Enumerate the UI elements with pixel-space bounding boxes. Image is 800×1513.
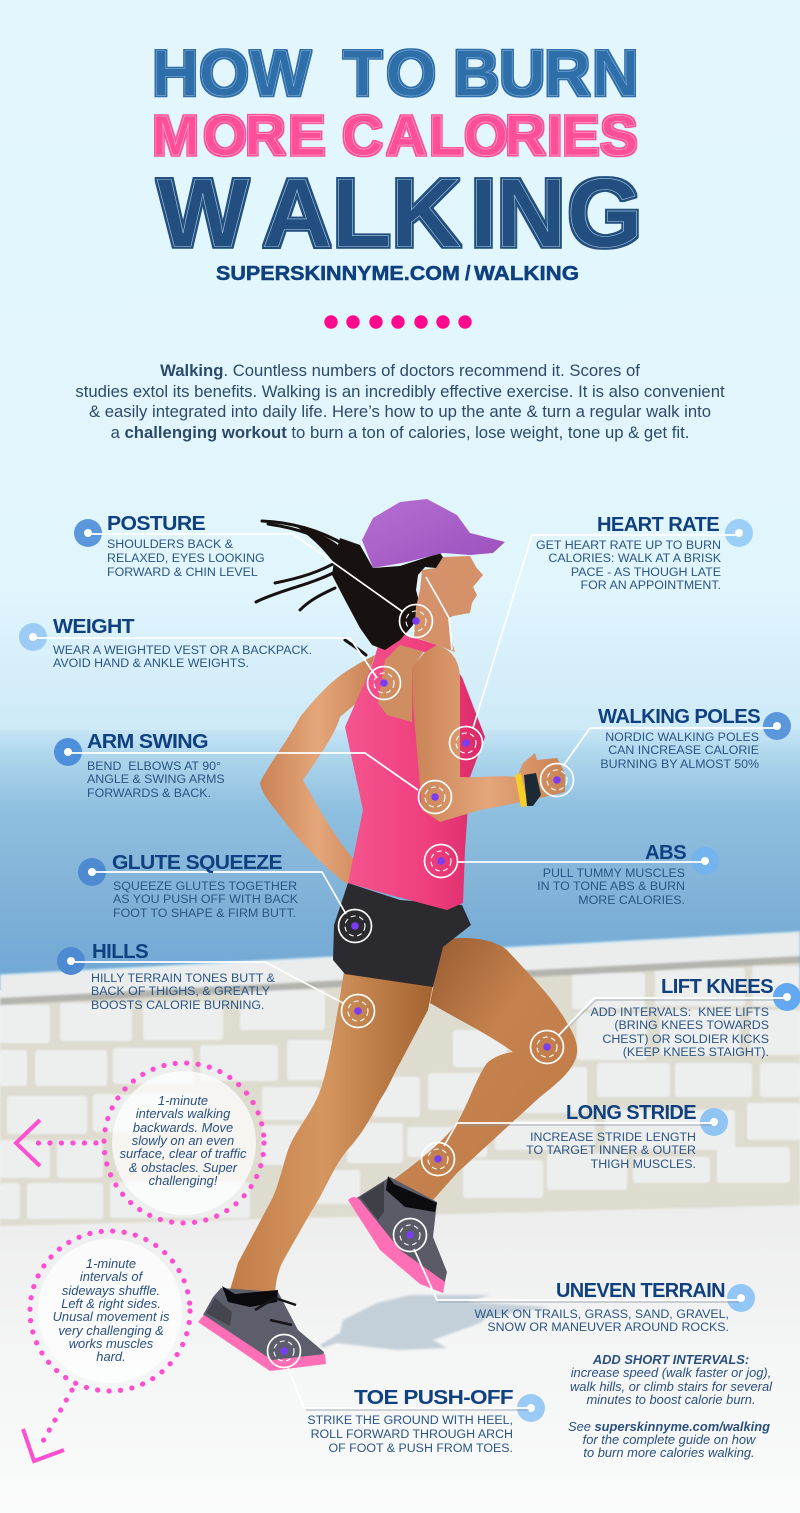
callout: posture xyxy=(74,513,403,612)
icon: long stride dot xyxy=(700,1108,728,1136)
url subtitle xyxy=(216,263,579,285)
icon: weight dot xyxy=(19,623,47,651)
heading: glute squeeze: GLUTE SQUEEZE xyxy=(112,852,282,874)
text: heart rate xyxy=(536,538,722,592)
text block: add short intervals: ADD SHORT INTERVALS: xyxy=(592,1352,749,1367)
text: heart rate: CALORIES: WALK AT A BRISK xyxy=(548,551,722,565)
near arm xyxy=(412,645,565,822)
icon: glute dot xyxy=(78,858,106,886)
shadow under uneven terrain line xyxy=(438,1301,739,1303)
title line: how to burn: HOW TO BURN xyxy=(152,38,639,110)
text: arm swing: ANGLE & SWING ARMS xyxy=(87,772,225,786)
text: lift knees: (KEEP KNEES STAIGHT). xyxy=(623,1045,769,1059)
url subtitle: WALKING xyxy=(474,263,579,285)
text: abs: IN TO TONE ABS & BURN xyxy=(537,879,685,893)
leader line: lift knees xyxy=(559,998,787,1035)
text: uneven terrain: SNOW OR MANEUVER AROUND ROCKS. xyxy=(487,1320,729,1334)
text: toe push-off: ROLL FORWARD THROUGH ARCH xyxy=(311,1427,513,1441)
row of pink dots xyxy=(324,315,472,329)
text: weight xyxy=(53,643,312,670)
leader line: toe push-off xyxy=(288,1368,531,1408)
callout text: intervals walking xyxy=(136,1106,231,1121)
arrow: down-left xyxy=(23,1390,72,1461)
callout text: sideways shuffle. xyxy=(62,1283,160,1298)
marker: long stride xyxy=(422,1142,454,1176)
callout text: 1-minute xyxy=(86,1256,136,1271)
wristband and watch xyxy=(515,773,541,807)
text: long stride xyxy=(526,1130,696,1171)
heading: weight: WEIGHT xyxy=(53,616,134,638)
marker: toe push-off xyxy=(268,1334,300,1368)
callout text: 1-minute xyxy=(158,1093,208,1108)
leader line: heart rate xyxy=(473,535,739,728)
heading: heart rate: HEART RATE xyxy=(597,514,719,536)
earphone and cable xyxy=(426,577,452,650)
text: glute squeeze xyxy=(113,879,299,920)
marker: abs xyxy=(424,844,458,878)
text: abs xyxy=(537,866,685,907)
icon: uneven terrain dot xyxy=(727,1284,755,1312)
text: toe push-off: STRIKE THE GROUND WITH HEEL, xyxy=(307,1413,513,1427)
text block: add short intervals xyxy=(568,1352,773,1460)
text: hills: HILLY TERRAIN TONES BUTT & xyxy=(91,971,276,985)
text: glute squeeze: SQUEEZE GLUTES TOGETHER xyxy=(113,879,297,893)
text: walking poles: NORDIC WALKING POLES xyxy=(605,730,759,744)
icon: lift knees dot xyxy=(773,983,800,1011)
callout: uneven terrain xyxy=(414,1249,755,1334)
text block: add short intervals: minutes to boost calorie burn. xyxy=(586,1392,756,1407)
icon: toe push-off dot xyxy=(517,1394,545,1422)
title line: more calories: MORE CALORIES xyxy=(152,104,638,167)
text block: add short intervals: walk hills, or climb stairs for several xyxy=(570,1379,773,1394)
text: long stride: INCREASE STRIDE LENGTH xyxy=(530,1130,696,1144)
text block: add short intervals: See superskinnyme.com/walking xyxy=(568,1419,770,1434)
heading: abs: ABS xyxy=(645,842,686,864)
text: uneven terrain xyxy=(474,1307,729,1334)
leader line: long stride xyxy=(444,1123,714,1146)
tank top xyxy=(345,633,485,910)
marker: arm swing xyxy=(418,780,452,814)
text: weight: AVOID HAND & ANKLE WEIGHTS. xyxy=(53,656,249,670)
callout: glute squeeze xyxy=(78,852,346,920)
text: toe push-off: OF FOOT & PUSH FROM TOES. xyxy=(328,1441,513,1455)
callout text: Unusal movement is xyxy=(53,1309,170,1324)
front shoe xyxy=(198,1286,326,1371)
callout: arm swing xyxy=(54,731,418,800)
text: posture: FORWARD & CHIN LEVEL xyxy=(107,565,258,579)
callout text xyxy=(53,1256,170,1364)
background: stone wall xyxy=(0,932,800,1226)
callout text xyxy=(120,1093,247,1188)
text: walking poles: CAN INCREASE CALORIE xyxy=(608,743,759,757)
text: lift knees xyxy=(590,1005,769,1059)
text block: add short intervals: to burn more calories walking. xyxy=(583,1445,755,1460)
heading: toe push-off: TOE PUSH-OFF xyxy=(354,1387,513,1409)
text: abs: MORE CALORIES. xyxy=(578,893,685,907)
target markers xyxy=(268,604,574,1368)
face and neck xyxy=(414,556,483,652)
leader line: weight xyxy=(33,638,377,678)
callout: walking poles xyxy=(563,706,791,771)
arrow: left xyxy=(16,1120,96,1166)
intro paragraph: studies extol its benefits. Walking is an incredibly effective exercise. It is also convenient xyxy=(75,382,725,401)
callout: abs xyxy=(458,842,719,907)
marker: weight xyxy=(368,666,400,700)
leader line: glute xyxy=(92,872,346,914)
text: heart rate: PACE - AS THOUGH LATE xyxy=(571,565,721,579)
leader line: posture xyxy=(88,534,403,612)
text: lift knees: ADD INTERVALS: KNEE LIFTS xyxy=(590,1005,769,1019)
text: posture xyxy=(107,537,265,579)
callout: lift knees xyxy=(559,976,800,1059)
background: ground xyxy=(0,1190,800,1513)
text: posture: RELAXED, EYES LOOKING xyxy=(107,551,265,565)
runner illustration xyxy=(198,499,577,1371)
leader line: abs xyxy=(458,861,705,863)
callout text: hard. xyxy=(96,1349,126,1364)
icon: heart rate dot xyxy=(725,519,753,547)
back skin between straps xyxy=(372,637,425,728)
leader line: arm swing xyxy=(68,753,418,790)
text: walking poles: BURNING BY ALMOST 50% xyxy=(600,757,759,771)
circle callout: walking backwards xyxy=(16,1063,264,1223)
intro paragraph: Walking. Countless numbers of doctors recommend it. Scores of xyxy=(160,361,640,380)
callout text: intervals of xyxy=(80,1269,144,1284)
text: heart rate: FOR AN APPOINTMENT. xyxy=(581,578,721,592)
heading: hills: HILLS xyxy=(92,941,148,963)
title line: walking: WALKING xyxy=(157,158,642,268)
text: hills xyxy=(91,971,276,1012)
marker: hills xyxy=(342,994,374,1028)
text: lift knees: (BRING KNEES TOWARDS xyxy=(614,1018,769,1032)
callout text: backwards. Move xyxy=(133,1120,233,1135)
callout text: challenging! xyxy=(149,1173,218,1188)
text: hills: BACK OF THIGHS, & GREATLY xyxy=(91,984,270,998)
front leg xyxy=(230,960,435,1294)
intro paragraph xyxy=(75,361,725,442)
leader line: uneven terrain xyxy=(414,1249,741,1300)
text: heart rate: GET HEART RATE UP TO BURN xyxy=(536,538,721,552)
ponytail and hair xyxy=(256,521,445,655)
icon: posture dot xyxy=(74,519,102,547)
text block: add short intervals: for the complete guide on how xyxy=(583,1432,756,1447)
text: arm swing xyxy=(87,759,225,800)
callout text: works muscles xyxy=(69,1336,154,1351)
rear shoe xyxy=(348,1176,447,1293)
leader line: hills xyxy=(71,962,343,1003)
far arm xyxy=(260,655,375,884)
circle callout: sideways shuffle xyxy=(23,1231,190,1461)
text: glute squeeze: FOOT TO SHAPE & FIRM BUTT. xyxy=(113,906,296,920)
heading: arm swing: ARM SWING xyxy=(87,731,208,753)
text: arm swing: BEND ELBOWS AT 90° xyxy=(87,759,221,773)
callout text: & obstacles. Super xyxy=(129,1160,238,1175)
ground shadow of the runner xyxy=(320,1295,550,1350)
background: sea xyxy=(0,730,800,990)
text: toe push-off xyxy=(307,1413,513,1455)
text: walking poles xyxy=(600,730,759,771)
callout: long stride xyxy=(444,1102,728,1171)
cap xyxy=(362,499,505,568)
heading: long stride: LONG STRIDE xyxy=(566,1102,696,1124)
intro paragraph: & easily integrated into daily life. Here’s how to up the ante & turn a regular walk into xyxy=(89,402,711,421)
heading: uneven terrain: UNEVEN TERRAIN xyxy=(556,1280,725,1302)
text: uneven terrain: WALK ON TRAILS, GRASS, SAND, GRAVEL, xyxy=(474,1307,729,1321)
text: abs: PULL TUMMY MUSCLES xyxy=(543,866,685,880)
shadow under long stride line xyxy=(460,1124,712,1126)
leader line: walking poles xyxy=(563,728,777,766)
marker: uneven terrain xyxy=(394,1218,426,1252)
callout: heart rate xyxy=(473,514,753,728)
marker: posture xyxy=(400,604,432,638)
shorts xyxy=(333,883,471,987)
callout text: very challenging & xyxy=(58,1323,164,1338)
text: glute squeeze: AS YOU PUSH OFF WITH BACK xyxy=(113,892,299,906)
icon: hills dot xyxy=(57,947,85,975)
text block: add short intervals: increase speed (walk faster or jog), xyxy=(571,1365,771,1380)
icon: arm swing dot xyxy=(54,738,82,766)
title xyxy=(152,38,642,268)
icon: abs dot xyxy=(691,847,719,875)
url subtitle: SUPERSKINNYME.COM xyxy=(216,263,460,285)
heading: walking poles: WALKING POLES xyxy=(598,706,760,728)
text: long stride: THIGH MUSCLES. xyxy=(591,1157,696,1171)
marker: lift knees xyxy=(530,1030,564,1064)
url subtitle: / xyxy=(465,263,471,285)
callout: toe push-off xyxy=(288,1368,545,1455)
intro paragraph: a challenging workout to burn a ton of calories, lose weight, tone up & get fit. xyxy=(111,423,689,442)
text: lift knees: CHEST) OR SOLDIER KICKS xyxy=(602,1032,769,1046)
shadow under lift knees line xyxy=(559,1000,785,1036)
icon: walking poles dot xyxy=(763,712,791,740)
shadow under toe line xyxy=(306,1409,529,1411)
callout: hills xyxy=(57,941,343,1012)
text: long stride: TO TARGET INNER & OUTER xyxy=(526,1143,696,1157)
text: weight: WEAR A WEIGHTED VEST OR A BACKPACK. xyxy=(53,643,312,657)
marker: walking poles xyxy=(540,764,574,796)
callout text: Left & right sides. xyxy=(61,1296,161,1311)
callout text: slowly on an even xyxy=(132,1133,234,1148)
text: posture: SHOULDERS BACK & xyxy=(107,537,234,551)
heading: posture: POSTURE xyxy=(107,513,205,535)
callout text: surface, clear of traffic xyxy=(120,1146,247,1161)
rear leg xyxy=(393,938,577,1200)
heading: lift knees: LIFT KNEES xyxy=(661,976,773,998)
text: arm swing: FORWARDS & BACK. xyxy=(87,786,211,800)
marker: heart rate xyxy=(450,726,482,760)
background: sky xyxy=(0,0,800,735)
marker: glute xyxy=(338,910,372,942)
text: hills: BOOSTS CALORIE BURNING. xyxy=(91,998,264,1012)
callout: weight xyxy=(19,616,377,678)
